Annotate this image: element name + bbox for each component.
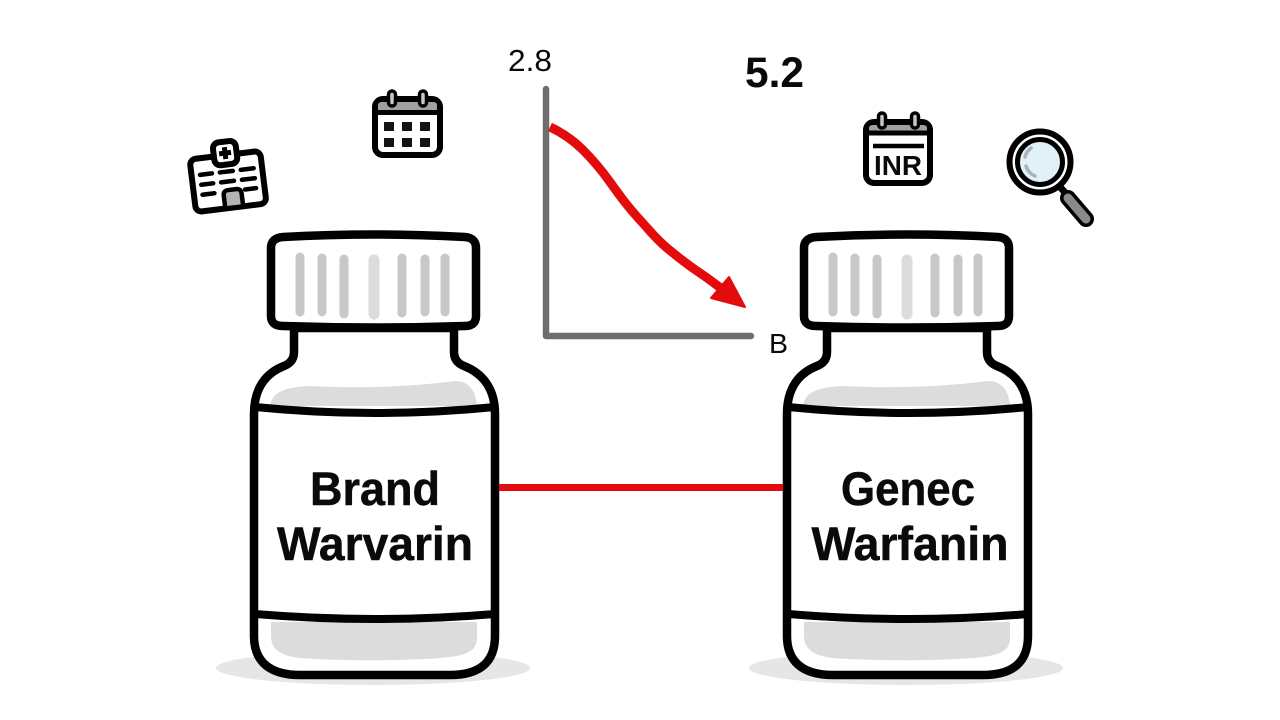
chart axes xyxy=(546,89,751,336)
cap ridges xyxy=(300,257,445,314)
cap ridges xyxy=(833,257,978,314)
bottle body xyxy=(254,328,495,675)
cap xyxy=(804,234,1009,328)
label text: Warvarin xyxy=(277,517,473,570)
red declining arrow xyxy=(550,127,745,307)
lower gray band xyxy=(804,622,1010,660)
icon: INR calendar xyxy=(866,113,930,183)
label bands xyxy=(788,407,1028,619)
icon: magnifying glass xyxy=(1010,132,1086,219)
label text xyxy=(277,462,473,570)
label bands xyxy=(255,407,495,619)
upper gray band xyxy=(803,381,1010,406)
label text: Brand xyxy=(310,462,440,515)
label text: Warfanin xyxy=(812,517,1008,570)
left bottle: Brand Warvarin xyxy=(216,234,530,685)
red connector line xyxy=(499,484,783,491)
axis label B: B xyxy=(769,328,788,359)
label text: Genec xyxy=(841,462,975,515)
icon: hospital xyxy=(188,137,267,212)
cap xyxy=(271,234,476,328)
line chart xyxy=(508,43,788,359)
icon: calendar xyxy=(375,91,440,155)
lower gray band xyxy=(271,622,477,660)
ground shadow xyxy=(216,651,530,685)
axis value 2.8: 2.8 xyxy=(508,43,552,78)
upper gray band xyxy=(270,381,477,406)
bottle body xyxy=(787,328,1028,675)
icon: INR calendar: INR xyxy=(874,150,922,181)
value 5.2: 5.2 xyxy=(745,49,804,97)
right bottle: Genec Warfanin xyxy=(749,234,1063,685)
ground shadow xyxy=(749,651,1063,685)
label text xyxy=(812,462,1008,570)
